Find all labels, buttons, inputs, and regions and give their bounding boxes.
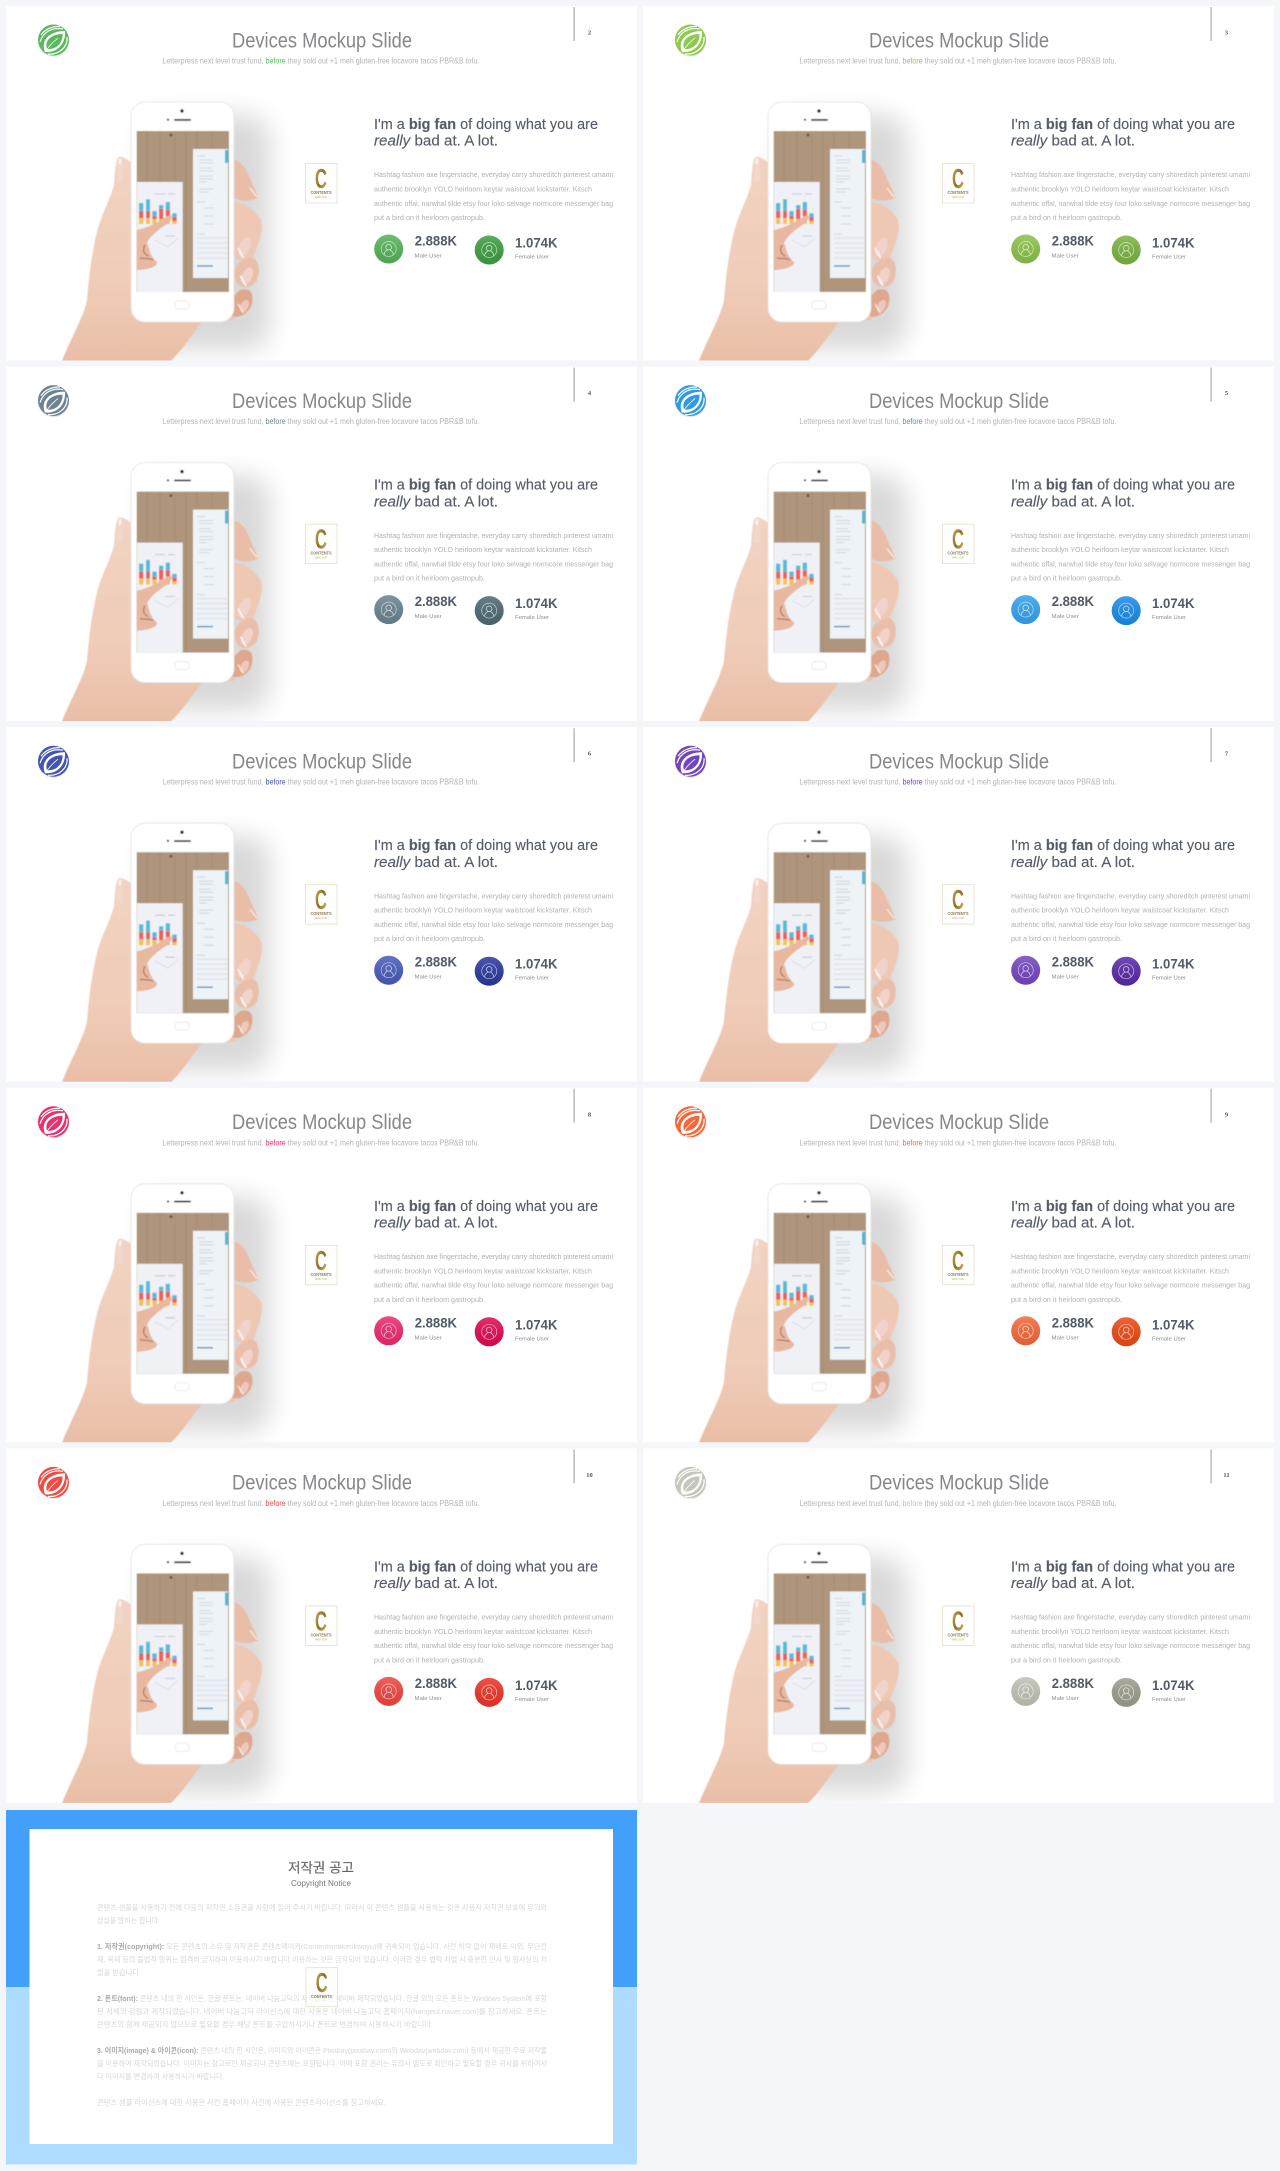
heading: I'm a big fan of doing what you are	[1011, 477, 1235, 494]
body text: Hashtag fashion axe fingerstache, everyday carry shoreditch pinterest umami	[1011, 1613, 1250, 1622]
heading: really bad at. A lot.	[374, 1575, 498, 1592]
subtitle: Letterpress next level trust fund, before they sold out +1 meh gluten-free locavore tacos PBR&B tofu.	[799, 417, 1116, 426]
heading: really bad at. A lot.	[1011, 133, 1135, 150]
stat: male user: Male User	[415, 975, 442, 981]
body text: put a bird on it heirloom gastropub.	[1011, 934, 1122, 943]
body text: authentic offal, narwhal tilde etsy four loko selvage normcore messenger bag	[374, 1281, 613, 1290]
body text: authentic offal, narwhal tilde etsy four loko selvage normcore messenger bag	[374, 920, 613, 929]
heading	[1011, 477, 1235, 510]
page number marker	[1210, 728, 1229, 762]
icon: leaf logo	[675, 385, 706, 417]
icon: gold contents badge: CONTENTS	[948, 1272, 968, 1277]
heading: I'm a big fan of doing what you are	[374, 837, 598, 854]
body text: Hashtag fashion axe fingerstache, everyday carry shoreditch pinterest umami	[1011, 170, 1250, 179]
body text	[1011, 1252, 1250, 1304]
stat: male user: Male User	[1052, 975, 1079, 981]
page number marker: 3	[1225, 30, 1229, 36]
icon: gold contents badge: C	[952, 884, 964, 915]
heading: I'm a big fan of doing what you are	[374, 1558, 598, 1575]
icon: gold contents badge: C	[952, 524, 964, 555]
icon: leaf logo	[675, 1467, 706, 1499]
stat: female user: 1.074K	[515, 236, 558, 250]
closing note: 콘텐츠 샘플 라이선스에 대한 사용은 사전 홈페이지 사전에 사용된 콘텐츠라이선스를 참고하세요.	[97, 2097, 386, 2107]
stat: female user: 1.074K	[515, 1317, 558, 1332]
heading	[374, 116, 598, 150]
heading	[1011, 837, 1235, 871]
body text: authentic brooklyn YOLO heirloom keytar waistcoat kickstarter. Kitsch	[1011, 184, 1229, 194]
stat: female user	[475, 596, 558, 625]
body text	[1011, 1613, 1250, 1664]
device mockup: hand holding phone	[698, 823, 907, 1083]
icon: gold contents badge: MAKE YOUR	[952, 1637, 964, 1641]
clause 1: copyright: 1. 저작권(copyright): 모든 콘텐츠의 소유 및 저작권은 콘텐츠메이커(Contentsmaker/kwoyu)에 귀속되어 있습니다. 사전 허락 없이 재배포 이외, 무단전	[97, 1941, 547, 1951]
heading	[1011, 116, 1235, 150]
stat: female user: Female User	[515, 615, 549, 621]
body text: authentic brooklyn YOLO heirloom keytar waistcoat kickstarter. Kitsch	[374, 1266, 592, 1275]
body text: authentic offal, narwhal tilde etsy four loko selvage normcore messenger bag	[1011, 920, 1250, 929]
subtitle: Letterpress next level trust fund, before they sold out +1 meh gluten-free locavore tacos PBR&B tofu.	[799, 778, 1116, 787]
body text: authentic brooklyn YOLO heirloom keytar waistcoat kickstarter. Kitsch	[1011, 1627, 1229, 1636]
page number marker	[1210, 1449, 1230, 1483]
icon: leaf logo	[38, 1467, 69, 1499]
body text: Hashtag fashion axe fingerstache, everyday carry shoreditch pinterest umami	[1011, 1252, 1250, 1261]
clause 1: copyright	[97, 1941, 547, 1977]
stat: male user: 2.888K	[415, 594, 457, 609]
heading: really bad at. A lot.	[1011, 1575, 1135, 1592]
heading: really bad at. A lot.	[374, 493, 498, 510]
icon: leaf logo	[38, 1106, 69, 1138]
body text	[1011, 170, 1250, 222]
body text: put a bird on it heirloom gastropub.	[1011, 1655, 1122, 1664]
heading: really bad at. A lot.	[374, 854, 498, 871]
icon: gold contents badge: C	[952, 163, 964, 194]
stat: male user: 2.888K	[1052, 594, 1094, 609]
body text: put a bird on it heirloom gastropub.	[374, 213, 485, 222]
stat: female user: Female User	[1152, 976, 1186, 982]
stat: male user: Male User	[1052, 254, 1079, 260]
heading: I'm a big fan of doing what you are	[1011, 837, 1235, 854]
icon: gold contents badge	[306, 524, 337, 564]
body text: Hashtag fashion axe fingerstache, everyday carry shoreditch pinterest umami	[374, 170, 613, 179]
panel: copyright notice	[6, 1810, 637, 2164]
title: Devices Mockup Slide	[869, 390, 1049, 413]
icon: gold contents badge: CONTENTS	[310, 1632, 332, 1637]
icon: gold contents badge: MAKE YOUR	[315, 1637, 327, 1641]
body text: Hashtag fashion axe fingerstache, everyday carry shoreditch pinterest umami	[374, 1252, 613, 1261]
device mockup: hand holding phone	[698, 463, 907, 723]
stat: female user	[1112, 596, 1195, 625]
heading: really bad at. A lot.	[374, 133, 498, 150]
body text: authentic brooklyn YOLO heirloom keytar waistcoat kickstarter. Kitsch	[374, 545, 592, 554]
stat: female user: 1.074K	[1152, 236, 1195, 250]
stat: male user	[374, 1676, 457, 1706]
panel: slide 9 orange	[643, 1088, 1274, 1444]
icon: gold contents badge: C	[315, 884, 327, 915]
icon: gold contents badge: MAKE YOUR	[315, 1277, 327, 1281]
stat: female user: Female User	[1152, 254, 1186, 260]
body text: authentic offal, narwhal tilde etsy four loko selvage normcore messenger bag	[1011, 559, 1250, 568]
stat: male user: Male User	[415, 1696, 442, 1702]
page number marker	[574, 7, 591, 41]
icon: gold contents badge: CONTENTS	[310, 190, 332, 195]
stat: male user	[374, 594, 457, 624]
icon: gold contents badge: C	[315, 524, 327, 555]
icon: gold contents badge: MAKE YOUR	[952, 195, 964, 199]
subtitle: Letterpress next level trust fund, before they sold out +1 meh gluten-free locavore tacos PBR&B tofu.	[799, 56, 1116, 66]
device mockup: hand holding phone	[62, 823, 270, 1083]
stat: female user: Female User	[515, 1336, 549, 1342]
clause 3: image and icon: 을 이용하여 제작되었습니다. 이미지는 참고로만 제공되나 콘텐츠에는 포함됩니다. 이에 포함 권리는 유의사 별도로 확인하고 필요할 경우 귀사를 위하여서	[97, 2058, 547, 2068]
heading: I'm a big fan of doing what you are	[374, 1198, 598, 1215]
title: Devices Mockup Slide	[232, 751, 412, 774]
page number marker	[574, 728, 592, 762]
heading: I'm a big fan of doing what you are	[374, 116, 598, 133]
heading: really bad at. A lot.	[1011, 493, 1135, 510]
clause 3: image and icon: 다 이미지를 변경하여 사용하시기 바랍니다.	[97, 2071, 224, 2081]
stat: male user: 2.888K	[1052, 1676, 1094, 1691]
page number marker	[574, 368, 592, 402]
body text: put a bird on it heirloom gastropub.	[374, 574, 485, 583]
heading	[374, 1198, 598, 1232]
icon: gold contents badge: C	[315, 1245, 327, 1276]
stat: male user	[1011, 234, 1094, 264]
clause 2: font: 콘텐츠의 함께 제공되지 않으므로 필요할 경우 해당 폰트를 구입하시거나 폰트로 변경하여 사용하시기 바랍니다.	[97, 2019, 433, 2029]
device mockup: hand holding phone	[62, 463, 270, 723]
page number marker: 10	[586, 1472, 593, 1479]
panel: slide 7 purple	[643, 727, 1274, 1083]
body text: authentic offal, narwhal tilde etsy four loko selvage normcore messenger bag	[1011, 1281, 1250, 1290]
subtitle: Letterpress next level trust fund, before they sold out +1 meh gluten-free locavore tacos PBR&B tofu.	[162, 1499, 479, 1508]
body text: authentic brooklyn YOLO heirloom keytar waistcoat kickstarter. Kitsch	[1011, 1266, 1229, 1275]
panel: slide 3 light green	[643, 6, 1274, 362]
stat: female user: Female User	[515, 254, 549, 260]
panel: slide 6 indigo	[6, 727, 637, 1083]
panel: slide 5 blue	[643, 367, 1274, 723]
stat: female user	[1112, 236, 1195, 264]
icon: gold contents badge: CONTENTS	[310, 911, 332, 916]
body text: authentic brooklyn YOLO heirloom keytar waistcoat kickstarter. Kitsch	[374, 184, 592, 194]
icon: gold contents badge	[306, 163, 337, 203]
icon: gold contents badge	[942, 163, 974, 203]
stat: female user: 1.074K	[1152, 1317, 1195, 1332]
icon: gold contents badge overlay: C	[316, 1967, 328, 1998]
title: Devices Mockup Slide	[869, 751, 1049, 774]
body text: authentic offal, narwhal tilde etsy four loko selvage normcore messenger bag	[1011, 1641, 1250, 1650]
heading: I'm a big fan of doing what you are	[1011, 1198, 1235, 1215]
page number marker: 5	[1225, 390, 1229, 397]
heading	[1011, 1198, 1235, 1232]
icon: gold contents badge	[306, 884, 337, 924]
device mockup: hand holding phone	[698, 102, 907, 362]
stat: male user: Male User	[415, 614, 442, 620]
stat: male user	[374, 1315, 457, 1345]
page number marker: 6	[588, 751, 592, 758]
panel: slide 11 stone grey	[643, 1448, 1274, 1804]
icon: leaf logo	[675, 746, 706, 778]
body text	[1011, 531, 1250, 583]
subtitle: Letterpress next level trust fund, before they sold out +1 meh gluten-free locavore tacos PBR&B tofu.	[162, 1138, 479, 1147]
body text: Hashtag fashion axe fingerstache, everyday carry shoreditch pinterest umami	[374, 531, 613, 540]
stat: male user: 2.888K	[1052, 234, 1094, 248]
icon: gold contents badge: CONTENTS	[948, 911, 968, 916]
body text: authentic brooklyn YOLO heirloom keytar waistcoat kickstarter. Kitsch	[1011, 906, 1229, 915]
panel: slide 2 green	[6, 6, 637, 362]
page number marker: 4	[588, 390, 592, 397]
stat: female user	[475, 957, 558, 986]
clause 2: font: 2. 폰트(font): 콘텐츠 내의 한 사인은, 한글 폰트는, 네이버 나눔고딕의 저작물로서 네이버 제작되었습니다. 한글 외의 모든 폰트는 Windows System에 포함	[97, 1993, 547, 2003]
heading	[374, 837, 598, 871]
subtitle: Letterpress next level trust fund, before they sold out +1 meh gluten-free locavore tacos PBR&B tofu.	[799, 1499, 1116, 1508]
copyright title: 저작권 공고	[288, 1860, 354, 1876]
icon: gold contents badge overlay: CONTENTS	[311, 1994, 332, 1999]
stat: male user: Male User	[1052, 614, 1079, 620]
stat: female user	[1112, 1317, 1195, 1346]
icon: gold contents badge: C	[952, 1605, 964, 1636]
stat: female user	[475, 1678, 558, 1707]
copyright subtitle: Copyright Notice	[291, 1878, 351, 1888]
subtitle: Letterpress next level trust fund, before they sold out +1 meh gluten-free locavore tacos PBR&B tofu.	[162, 417, 479, 426]
icon: gold contents badge: CONTENTS	[948, 1632, 968, 1637]
body text: put a bird on it heirloom gastropub.	[1011, 213, 1122, 222]
heading	[374, 1558, 598, 1592]
body text: authentic offal, narwhal tilde etsy four loko selvage normcore messenger bag	[374, 199, 613, 208]
body text	[374, 170, 613, 222]
subtitle: Letterpress next level trust fund, before they sold out +1 meh gluten-free locavore tacos PBR&B tofu.	[799, 1138, 1116, 1147]
icon: gold contents badge	[306, 1605, 337, 1645]
stat: female user: 1.074K	[1152, 596, 1195, 611]
stat: male user	[1011, 1676, 1094, 1706]
heading: I'm a big fan of doing what you are	[1011, 116, 1235, 133]
stat: female user: Female User	[515, 976, 549, 982]
stat: male user: 2.888K	[1052, 1315, 1094, 1330]
title: Devices Mockup Slide	[232, 390, 412, 413]
icon: gold contents badge: CONTENTS	[948, 190, 968, 195]
stat: male user: 2.888K	[415, 1315, 457, 1330]
heading: really bad at. A lot.	[1011, 854, 1135, 871]
title: Devices Mockup Slide	[869, 29, 1049, 52]
body text: authentic offal, narwhal tilde etsy four loko selvage normcore messenger bag	[1011, 199, 1250, 208]
stat: male user: 2.888K	[1052, 955, 1094, 970]
body text: authentic brooklyn YOLO heirloom keytar waistcoat kickstarter. Kitsch	[1011, 545, 1229, 554]
icon: gold contents badge: MAKE YOUR	[315, 195, 327, 199]
body text: authentic offal, narwhal tilde etsy four loko selvage normcore messenger bag	[374, 559, 613, 568]
heading	[374, 477, 598, 510]
icon: gold contents badge	[306, 1245, 337, 1285]
page number marker	[1210, 368, 1229, 402]
icon: gold contents badge overlay	[306, 1967, 338, 2007]
device mockup: hand holding phone	[698, 1544, 907, 1804]
page number marker: 8	[588, 1111, 592, 1118]
body text: Hashtag fashion axe fingerstache, everyday carry shoreditch pinterest umami	[1011, 891, 1250, 900]
icon: gold contents badge: MAKE YOUR	[952, 916, 964, 920]
stat: male user: Male User	[415, 254, 442, 260]
title: Devices Mockup Slide	[232, 1111, 412, 1134]
body text: authentic brooklyn YOLO heirloom keytar waistcoat kickstarter. Kitsch	[374, 906, 592, 915]
stat: male user	[374, 955, 457, 985]
stat: female user: Female User	[1152, 1697, 1186, 1703]
stat: male user: 2.888K	[415, 955, 457, 970]
heading: really bad at. A lot.	[374, 1215, 498, 1232]
body text: put a bird on it heirloom gastropub.	[374, 1655, 485, 1664]
stat: male user: 2.888K	[415, 1676, 457, 1691]
body text: authentic offal, narwhal tilde etsy four loko selvage normcore messenger bag	[374, 1641, 613, 1650]
icon: leaf logo	[38, 24, 69, 56]
body text: Hashtag fashion axe fingerstache, everyday carry shoreditch pinterest umami	[374, 891, 613, 900]
icon: leaf logo	[675, 1106, 706, 1138]
icon: gold contents badge: CONTENTS	[310, 551, 332, 556]
stat: female user: 1.074K	[515, 596, 558, 611]
panel: slide 8 pink	[6, 1088, 637, 1444]
subtitle: Letterpress next level trust fund, before they sold out +1 meh gluten-free locavore tacos PBR&B tofu.	[162, 778, 479, 787]
intro paragraph: 성실을 말하는 합니다.	[97, 1915, 160, 1925]
clause 2: font	[97, 1993, 547, 2029]
page number marker: 7	[1225, 751, 1229, 758]
clause 3: image and icon: 3. 이미지(image) & 아이콘(icon): 콘텐츠 내의 한 사인은, 이미지와 아이콘은 Pixabay(pixabay.com)와 Webdav(webdav.com) 등에서 제공한 무료 저작물	[97, 2045, 547, 2055]
stat: female user	[1112, 1678, 1195, 1707]
stat: male user	[1011, 955, 1094, 985]
page number marker	[574, 1449, 593, 1483]
title: Devices Mockup Slide	[869, 1472, 1049, 1495]
body text	[374, 891, 613, 943]
panel: slide 4 slate	[6, 367, 637, 723]
subtitle: Letterpress next level trust fund, before they sold out +1 meh gluten-free locavore tacos PBR&B tofu.	[162, 56, 479, 66]
icon: leaf logo	[675, 24, 706, 56]
body text	[1011, 891, 1250, 943]
stat: male user	[1011, 594, 1094, 624]
body text: Hashtag fashion axe fingerstache, everyday carry shoreditch pinterest umami	[374, 1613, 613, 1622]
body text: put a bird on it heirloom gastropub.	[1011, 1295, 1122, 1304]
clause 2: font: 된 서체의 강점과 제작되었습니다. 네이버 나눔고딕 라이선스에 대한 사용은 네이버 나눔고딕 홈페이지(hangeul.naver.com)를 참고하세요. 폰트는	[97, 2006, 547, 2016]
body text: Hashtag fashion axe fingerstache, everyday carry shoreditch pinterest umami	[1011, 531, 1250, 540]
title: Devices Mockup Slide	[869, 1111, 1049, 1134]
stat: female user	[475, 1317, 558, 1346]
icon: gold contents badge	[942, 884, 974, 924]
stat: male user: 2.888K	[415, 234, 457, 248]
body text: authentic brooklyn YOLO heirloom keytar waistcoat kickstarter. Kitsch	[374, 1627, 592, 1636]
intro paragraph: 콘텐츠 샘플을 사용하기 전에 다음의 저작권 소유권을 사항에 읽어 주시기 바랍니다. 따라서 이 콘텐츠 샘플을 사용하는 것은 사용자 저작권 보호에 유의와	[97, 1902, 547, 1912]
stat: female user: Female User	[1152, 615, 1186, 621]
page number marker	[574, 1089, 592, 1123]
icon: gold contents badge: MAKE YOUR	[315, 916, 327, 920]
icon: gold contents badge: C	[315, 1605, 327, 1636]
device mockup: hand holding phone	[62, 1184, 270, 1444]
body text: put a bird on it heirloom gastropub.	[374, 934, 485, 943]
body text	[374, 1252, 613, 1304]
device mockup: hand holding phone	[698, 1184, 907, 1444]
icon: gold contents badge: CONTENTS	[310, 1272, 332, 1277]
icon: gold contents badge	[942, 1605, 974, 1645]
icon: gold contents badge	[942, 524, 974, 564]
clause 3: image and icon	[97, 2045, 547, 2081]
stat: male user: Male User	[1052, 1696, 1079, 1702]
device mockup: hand holding phone	[62, 102, 270, 362]
heading	[1011, 1558, 1235, 1592]
body text: put a bird on it heirloom gastropub.	[1011, 574, 1122, 583]
body text	[374, 1613, 613, 1664]
intro paragraph	[97, 1902, 547, 1925]
stat: male user: Male User	[415, 1335, 442, 1341]
icon: gold contents badge: CONTENTS	[948, 551, 968, 556]
stat: female user: Female User	[1152, 1336, 1186, 1342]
page number marker	[1210, 7, 1229, 41]
icon: gold contents badge: MAKE YOUR	[952, 556, 964, 560]
stat: male user: Male User	[1052, 1335, 1079, 1341]
stat: female user	[475, 236, 558, 264]
heading: really bad at. A lot.	[1011, 1215, 1135, 1232]
stat: female user: 1.074K	[515, 1678, 558, 1693]
clause 1: copyright: 벌을 받습니다.	[97, 1967, 141, 1977]
page number marker	[1210, 1089, 1229, 1123]
clause 1: copyright: 재, 복제 등의 불법적 행위는 엄격히 금지하며 이용하시기 바랍니다 이용하는 것은 금지되어 있습니다. 이러한 경우 법적 처벌 시 충분한 민사 및 형사상의 처	[97, 1954, 547, 1964]
heading: I'm a big fan of doing what you are	[1011, 1558, 1235, 1575]
title: Devices Mockup Slide	[232, 1472, 412, 1495]
device mockup: hand holding phone	[62, 1544, 270, 1804]
stat: female user: 1.074K	[1152, 1678, 1195, 1693]
stat: female user	[1112, 957, 1195, 986]
page number marker: 2	[588, 30, 591, 36]
stat: female user: Female User	[515, 1697, 549, 1703]
stat: female user: 1.074K	[1152, 957, 1195, 972]
icon: gold contents badge: C	[315, 163, 327, 194]
icon: gold contents badge: C	[952, 1245, 964, 1276]
icon: gold contents badge: MAKE YOUR	[952, 1277, 964, 1281]
title: Devices Mockup Slide	[232, 29, 412, 52]
stat: male user	[374, 234, 457, 264]
icon: leaf logo	[38, 746, 69, 778]
icon: gold contents badge	[942, 1245, 974, 1285]
icon: leaf logo	[38, 385, 69, 417]
page number marker: 9	[1225, 1111, 1229, 1118]
heading: I'm a big fan of doing what you are	[374, 477, 598, 494]
stat: male user	[1011, 1315, 1094, 1345]
page number marker: 11	[1223, 1472, 1230, 1479]
stat: female user: 1.074K	[515, 957, 558, 972]
body text: put a bird on it heirloom gastropub.	[374, 1295, 485, 1304]
body text	[374, 531, 613, 583]
panel: slide 10 red	[6, 1448, 637, 1804]
icon: gold contents badge: MAKE YOUR	[315, 556, 327, 560]
